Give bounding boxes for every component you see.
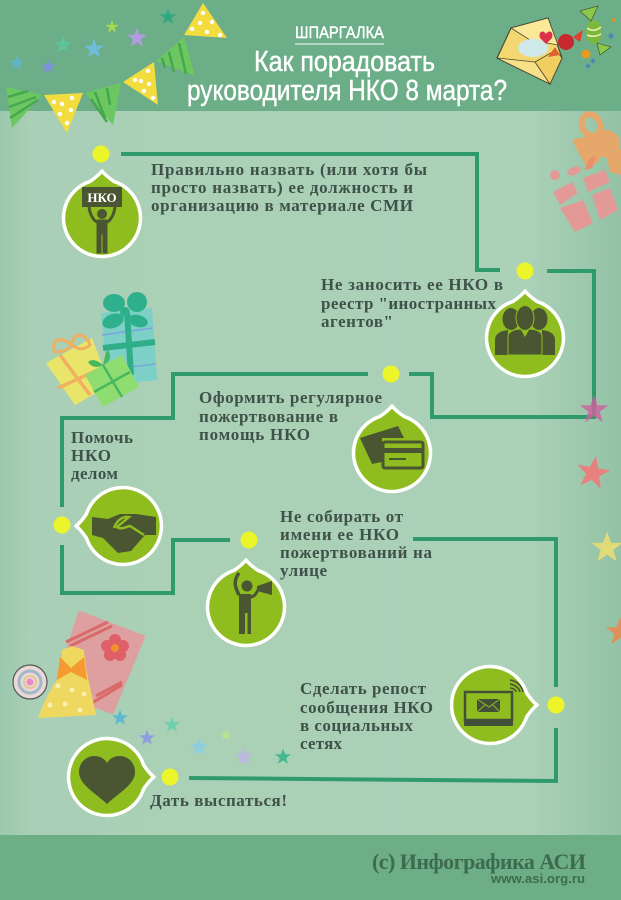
step 4: icon handshake	[76, 488, 161, 564]
step 3: text: помощь НКО	[199, 425, 310, 444]
step 4: text	[71, 428, 133, 483]
step 3: icon bank cards	[354, 406, 430, 491]
step 7: icon heart	[69, 738, 154, 816]
step 5: text: имени ее НКО	[280, 525, 399, 544]
decorative stars: bottom trail	[112, 710, 291, 765]
step 1: text: организацию в материале СМИ	[151, 196, 413, 215]
step 5: icon person with megaphone	[208, 560, 284, 645]
step dots	[54, 146, 564, 786]
gift decoration: left	[46, 292, 157, 407]
step 1: icon person with sign: НКО	[87, 190, 117, 205]
step 2: icon group of people	[486, 291, 564, 376]
step 1: icon person with sign	[64, 171, 140, 256]
step 5: text: Не собирать от	[280, 507, 404, 526]
title: руководителя НКО 8 марта?	[187, 75, 507, 107]
step 6: text: сетях	[300, 734, 342, 753]
title: Как порадовать	[254, 46, 435, 78]
header band	[0, 0, 621, 111]
step 3: text: Оформить регулярное	[199, 388, 382, 407]
connector path	[62, 154, 594, 781]
step 5: text	[280, 507, 432, 580]
decorative stars: right	[574, 395, 621, 644]
step 6: text: Сделать репост	[300, 679, 427, 698]
step 3: text	[199, 388, 382, 444]
step 6: text: сообщения НКО	[300, 698, 433, 717]
step 5: text: пожертвований на	[280, 543, 432, 562]
gift decoration: top right	[550, 111, 621, 232]
footer credit: (с) Инфографика АСИ	[372, 849, 586, 874]
title	[187, 46, 507, 107]
gift decoration: bottom left	[13, 613, 143, 718]
step 1: text: просто назвать) ее должность и	[151, 178, 413, 197]
step 6: text	[300, 679, 433, 753]
footer band	[0, 835, 621, 900]
step 3: text: пожертвование в	[199, 407, 338, 426]
step 5: text: улице	[280, 561, 327, 580]
bunting flags	[6, 3, 227, 133]
step 1: text: Правильно назвать (или хотя бы	[151, 160, 427, 179]
step 4: text: Помочь	[71, 428, 133, 447]
step 2: text: Не заносить ее НКО в	[321, 275, 503, 294]
step 4: text: делом	[71, 464, 118, 483]
step 7: text: Дать выспаться!	[150, 791, 287, 810]
footer credit: www.asi.org.ru	[490, 871, 585, 886]
envelope and candy	[497, 6, 616, 84]
step 4: text: НКО	[71, 446, 111, 465]
subtitle: ШПАРГАЛКА	[295, 23, 385, 42]
step 2: text	[321, 275, 503, 331]
header stars	[9, 8, 176, 73]
footer credit	[372, 849, 586, 886]
step 6: icon laptop with message	[452, 666, 537, 744]
step 1: text	[151, 160, 427, 215]
step 2: text: агентов"	[321, 312, 393, 331]
step 6: text: в социальных	[300, 716, 414, 735]
step 2: text: реестр "иностранных	[321, 294, 496, 313]
